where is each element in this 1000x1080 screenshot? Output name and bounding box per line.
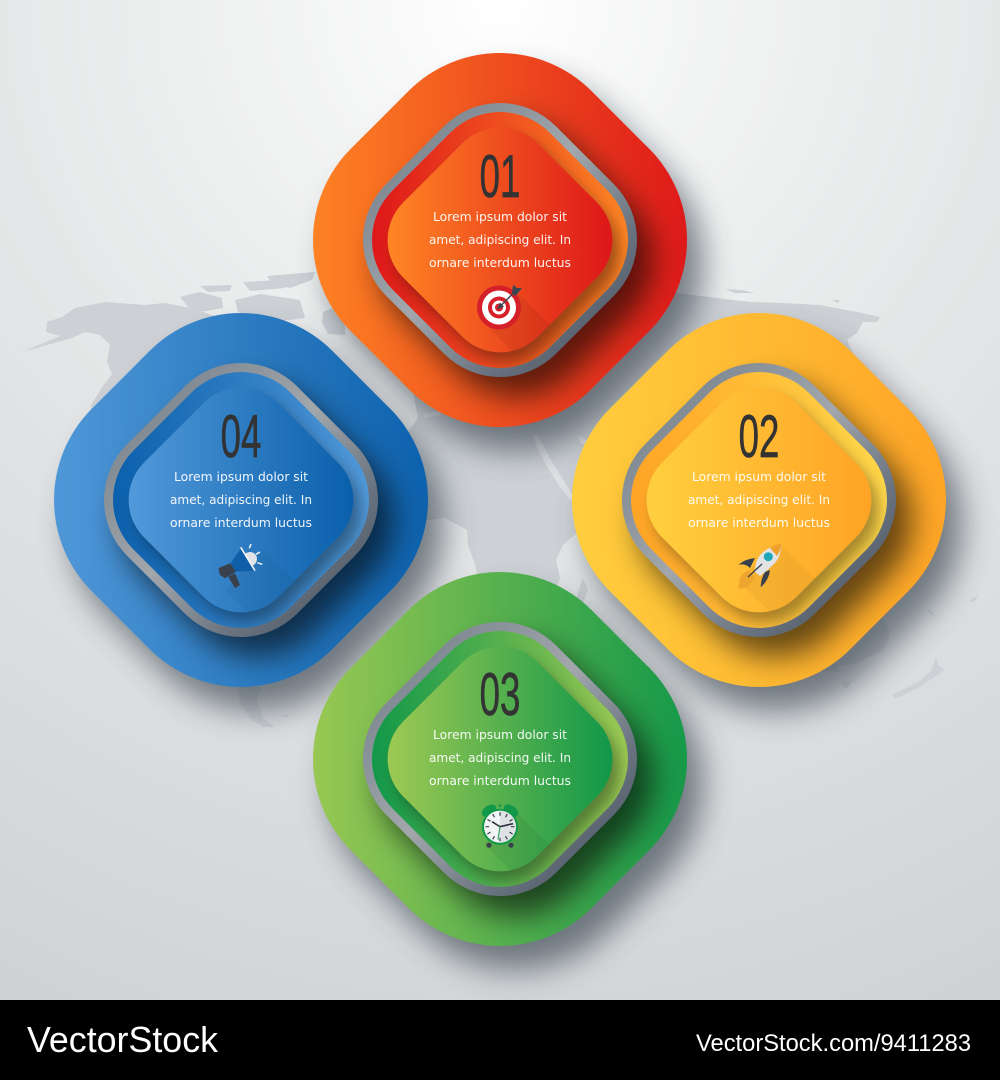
tasmania [842,680,853,688]
number: 02 [739,403,779,470]
description [429,728,571,788]
icon long shadow [738,547,815,611]
description: amet, adipiscing elit. In [170,493,312,507]
description: amet, adipiscing elit. In [429,233,571,247]
panel: card 01 [313,53,687,427]
ring shadow [358,102,674,418]
ring shadow [360,623,671,935]
number: 01 [480,143,520,210]
ring shadow [100,364,413,676]
number: 04 [221,403,261,470]
icon: megaphone [218,544,262,588]
inner face [625,366,893,634]
world map [22,272,978,727]
grey ring [589,330,929,670]
south america tip [237,687,275,727]
description: ornare interdum luctus [429,774,571,788]
description: Lorem ipsum dolor sit [433,728,567,742]
number: 03 [480,661,520,728]
madagascar [575,578,588,604]
persian gulf [579,435,588,448]
grey ring [330,589,670,929]
description: ornare interdum luctus [170,516,312,530]
inner face [366,625,634,893]
north america [22,302,300,420]
outer green shape [260,519,740,999]
outer blue shape [1,260,481,740]
description [429,210,571,270]
footer logo: VectorStock [27,1019,219,1060]
description [170,470,312,530]
panel: card 03 [313,572,687,946]
new zealand [892,658,945,699]
well shadow [646,390,886,628]
icon: rocket [738,544,782,589]
footer bar [0,1000,1000,1080]
well shadow [386,130,628,368]
outer yellow shape [519,260,999,740]
red sea [533,433,573,501]
description: Lorem ipsum dolor sit [174,470,308,484]
description [688,470,830,530]
icon: alarm clock [480,802,520,848]
panel: card 02 [572,313,946,687]
icon long shadow [484,814,548,870]
map inland seas [423,411,588,501]
description: Lorem ipsum dolor sit [692,470,826,484]
well shadow [388,652,627,887]
icon: target [477,285,522,330]
falkland islands [283,715,289,717]
well [343,83,657,397]
description: amet, adipiscing elit. In [429,751,571,765]
footer url: VectorStock.com/9411283 [696,1030,971,1057]
inner face [107,366,375,634]
well [84,343,398,657]
grey ring [71,330,411,670]
panel: card 04 [54,313,428,687]
inner face [366,106,634,374]
ring shadow [616,362,934,678]
icon long shadow [488,294,550,351]
siberian islands [725,289,840,303]
australia [800,617,890,672]
well [602,343,916,657]
description: Lorem ipsum dolor sit [433,210,567,224]
outer red shape [260,0,740,480]
eurasia and africa [400,293,880,590]
description: amet, adipiscing elit. In [688,493,830,507]
description: ornare interdum luctus [688,516,830,530]
description: ornare interdum luctus [429,256,571,270]
well [343,602,657,916]
grey ring [330,70,670,410]
small pacific islands [928,595,978,616]
icon long shadow [225,550,336,660]
well shadow [129,392,368,628]
mediterranean strip [423,411,441,418]
arctic islands [180,272,345,335]
